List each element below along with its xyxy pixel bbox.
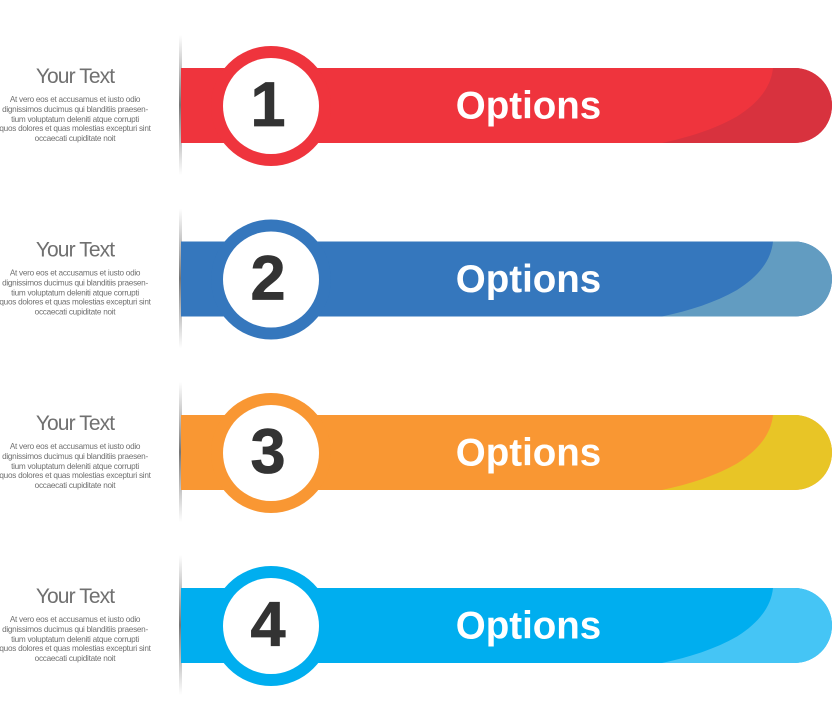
badge 3 bbox=[211, 393, 331, 513]
text block 3: dignissimos ducimus qui blanditiis praesen- bbox=[2, 452, 148, 461]
label 1: Options bbox=[456, 84, 601, 128]
text block 3 bbox=[0, 412, 152, 490]
text block 1: occaecati cupiditate noit bbox=[35, 134, 116, 143]
text block 3: tium voluptatum deleniti atque corrupti bbox=[11, 462, 139, 471]
text block 3: At vero eos et accusamus et iusto odio bbox=[10, 442, 141, 451]
text block 1: Your Text bbox=[36, 65, 115, 88]
text block 2: occaecati cupiditate noit bbox=[35, 308, 116, 316]
row 2 bbox=[0, 208, 832, 348]
divider 3 bbox=[179, 382, 182, 522]
row 1 bbox=[0, 35, 832, 175]
divider 1 bbox=[179, 35, 182, 175]
bar 4 bbox=[181, 588, 832, 663]
badge 4: 4 bbox=[250, 590, 286, 660]
badge 2: 2 bbox=[250, 244, 286, 314]
text block 4: dignissimos ducimus qui blanditiis praesen- bbox=[2, 625, 148, 634]
bar 2 bbox=[181, 242, 832, 316]
bar 1 bbox=[181, 68, 832, 143]
label 2: Options bbox=[456, 258, 601, 301]
bar accent 3 bbox=[662, 415, 832, 490]
badge 4 bbox=[211, 566, 331, 686]
text block 2 bbox=[0, 238, 152, 316]
text block 4 bbox=[0, 585, 152, 663]
text block 3: Your Text bbox=[36, 412, 115, 435]
text block 2: Your Text bbox=[36, 238, 115, 262]
bar accent 4 bbox=[662, 588, 832, 663]
text block 1: tium voluptatum deleniti atque corrupti bbox=[11, 115, 139, 124]
text block 4: occaecati cupiditate noit bbox=[35, 654, 116, 663]
badge 1: 1 bbox=[250, 70, 286, 140]
text block 2: quos dolores et quas molestias excepturi sint bbox=[0, 298, 152, 306]
text block 1 bbox=[0, 65, 152, 143]
text block 2: tium voluptatum deleniti atque corrupti bbox=[11, 288, 139, 298]
divider 4 bbox=[179, 555, 182, 695]
text block 4: At vero eos et accusamus et iusto odio bbox=[10, 615, 141, 624]
badge 2 bbox=[211, 220, 331, 340]
text block 2: dignissimos ducimus qui blanditiis praesen- bbox=[2, 278, 148, 288]
text block 1: At vero eos et accusamus et iusto odio bbox=[10, 95, 141, 104]
badge 1 bbox=[211, 46, 331, 166]
text block 3: quos dolores et quas molestias excepturi sint bbox=[0, 471, 152, 480]
text block 1: dignissimos ducimus qui blanditiis praesen- bbox=[2, 105, 148, 114]
bar accent 2 bbox=[662, 242, 832, 316]
bar 3 bbox=[181, 415, 832, 490]
text block 4: Your Text bbox=[36, 585, 115, 608]
row 3 bbox=[0, 382, 832, 522]
text block 3: occaecati cupiditate noit bbox=[35, 481, 116, 490]
text block 4: quos dolores et quas molestias excepturi sint bbox=[0, 644, 152, 653]
divider 2 bbox=[179, 208, 182, 348]
badge 3: 3 bbox=[250, 417, 286, 487]
row 4 bbox=[0, 555, 832, 695]
label 3: Options bbox=[456, 432, 601, 474]
text block 1: quos dolores et quas molestias excepturi sint bbox=[0, 124, 152, 133]
text block 2: At vero eos et accusamus et iusto odio bbox=[10, 268, 141, 278]
text block 4: tium voluptatum deleniti atque corrupti bbox=[11, 635, 139, 644]
bar accent 1 bbox=[662, 68, 832, 143]
label 4: Options bbox=[456, 604, 601, 648]
